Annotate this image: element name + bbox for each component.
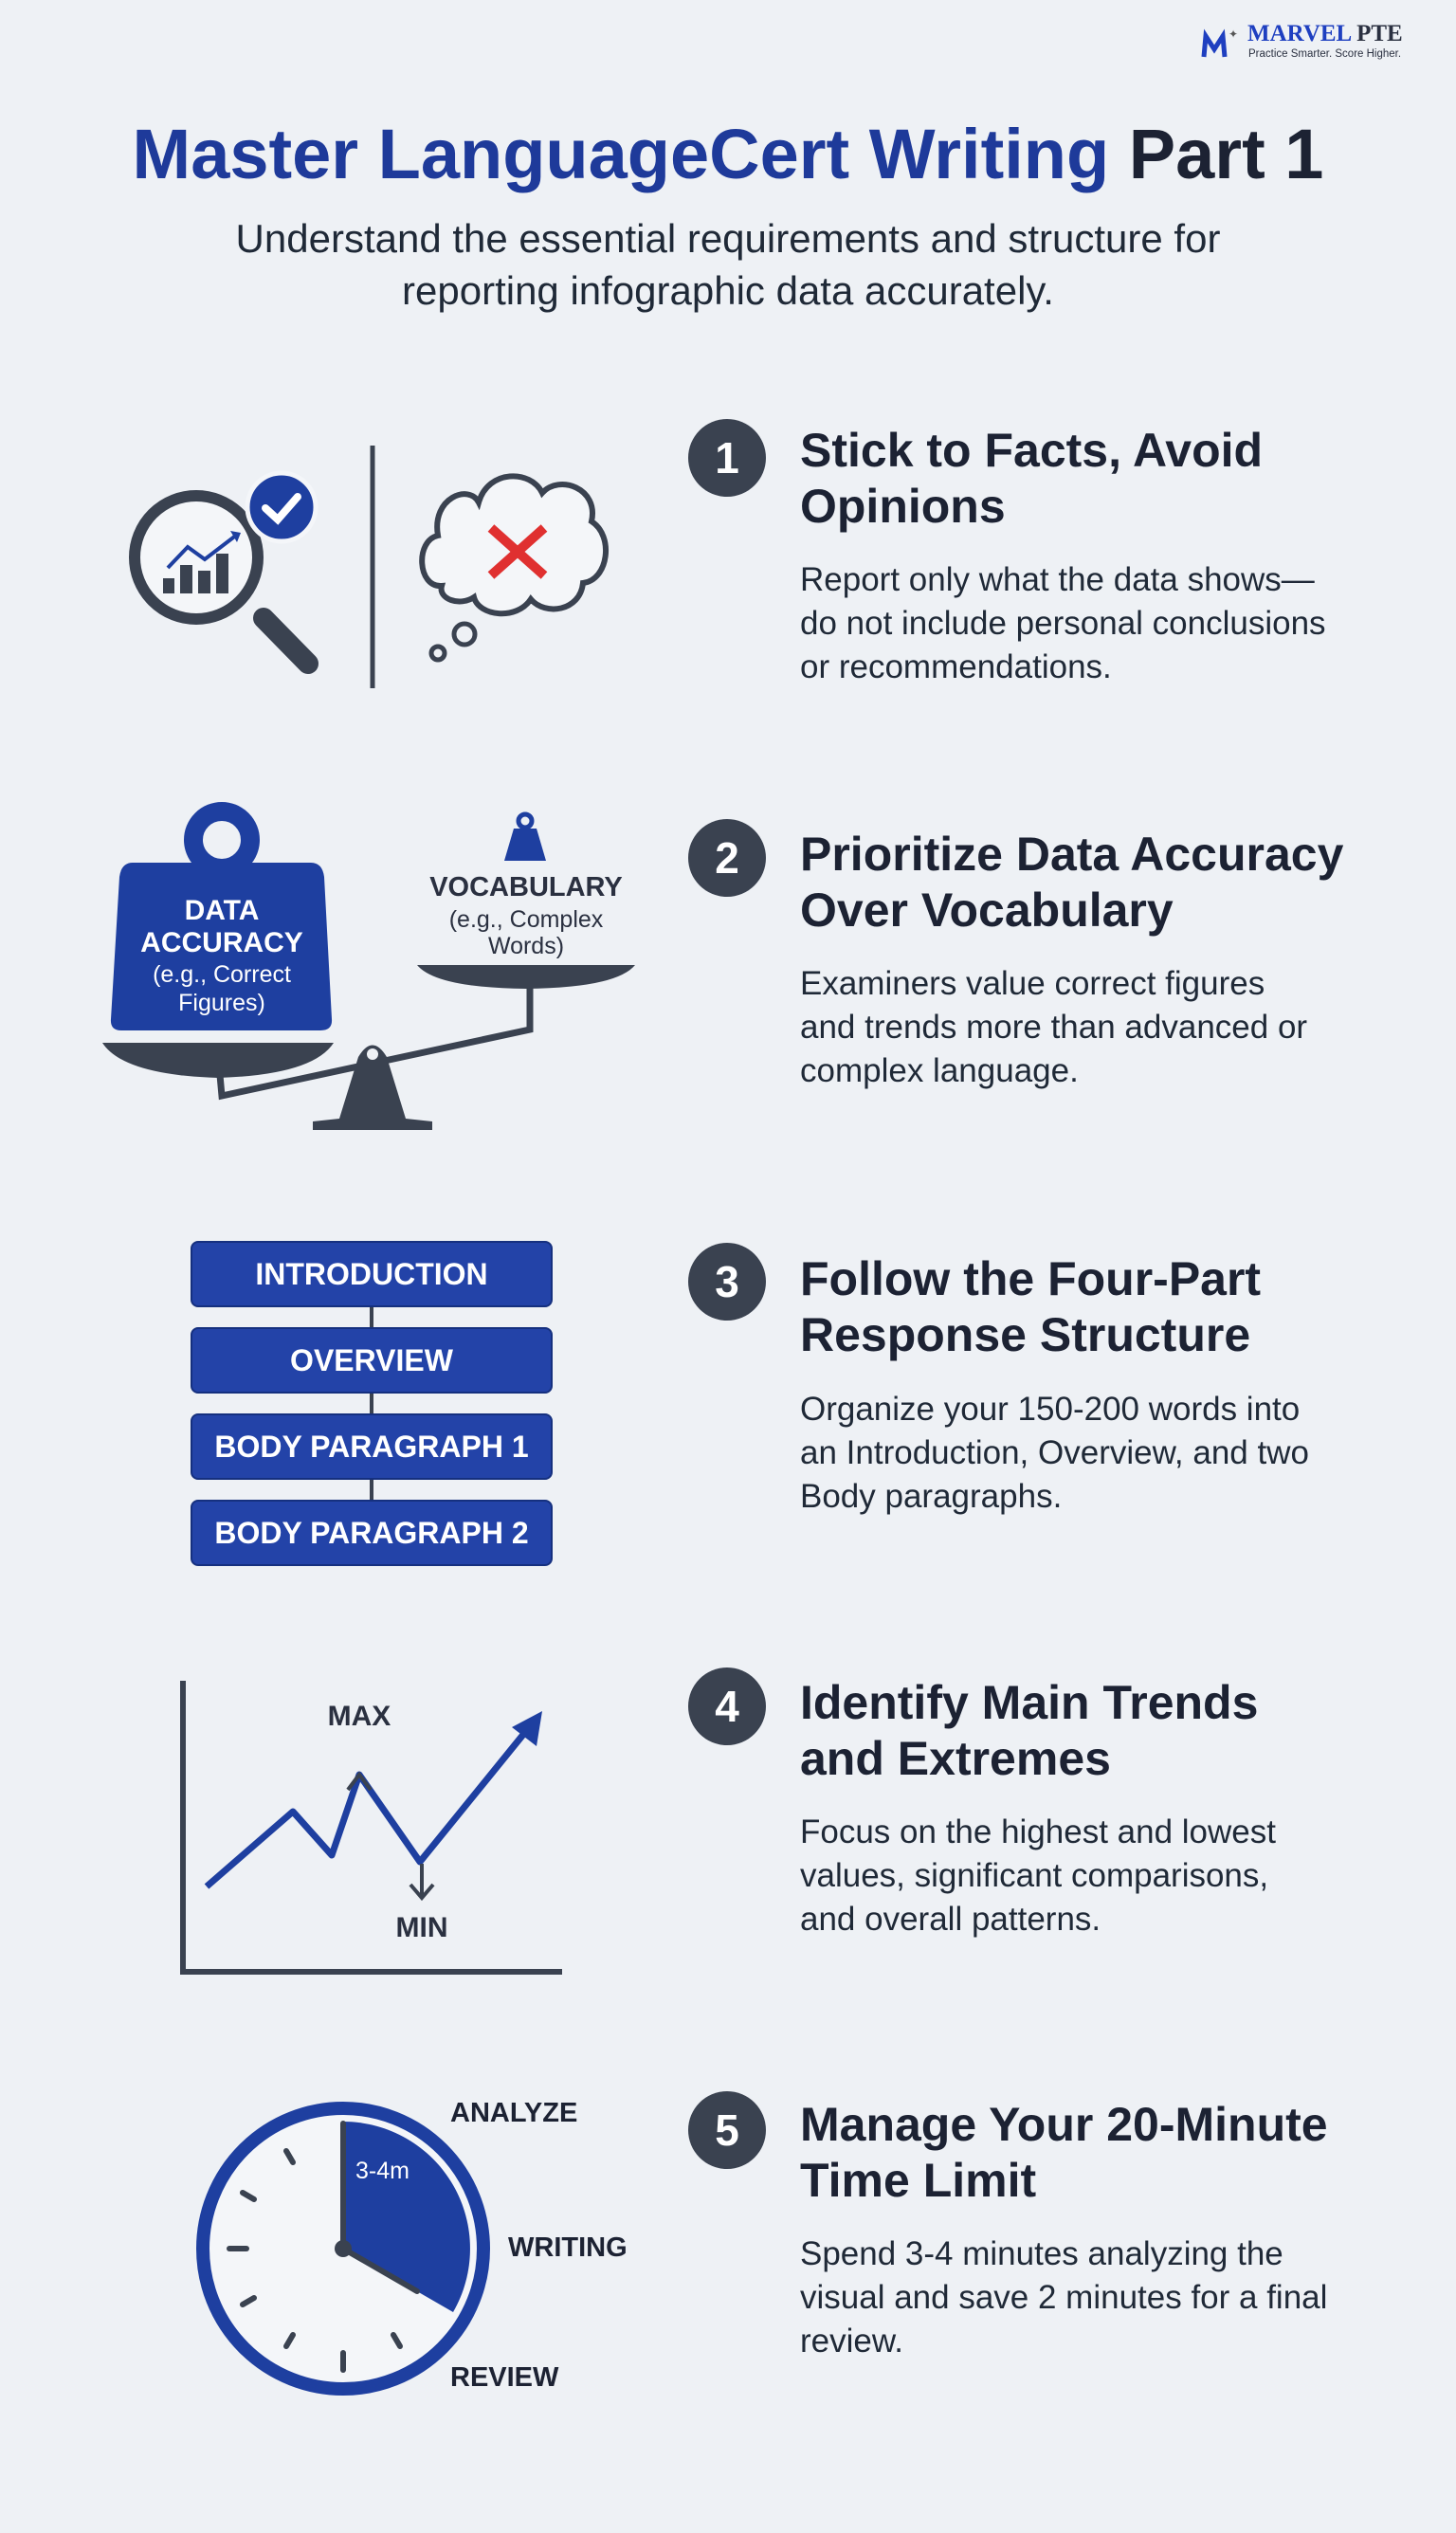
logo: Practice Smarter. Score Higher. [1248, 48, 1401, 60]
icon: four-part structure [370, 1307, 373, 1500]
text: Time Limit [800, 2154, 1036, 2207]
box: introduction [191, 1241, 553, 1307]
text: Focus on the highest and lowest [800, 1813, 1276, 1850]
icon: clock: WRITING [508, 2232, 628, 2263]
text: Opinions [800, 480, 1006, 533]
step 2: 2 [715, 833, 739, 883]
text: Follow the Four-Part [800, 1252, 1261, 1305]
text: an Introduction, Overview, and two [800, 1434, 1309, 1471]
text: review. [800, 2323, 903, 2360]
text: Examiners value correct figures [800, 965, 1265, 1002]
icon: balance scale: (e.g., Complex [449, 906, 604, 933]
step 4 [688, 1667, 766, 1745]
text: Body paragraphs. [800, 1478, 1062, 1515]
step 3 [688, 1243, 766, 1321]
text: Identify Main Trends [800, 1676, 1258, 1729]
icon: clock: REVIEW [450, 2362, 559, 2393]
icon: balance scale: DATA [185, 895, 259, 926]
icon: balance scale: ACCURACY [140, 927, 303, 958]
text: Over Vocabulary [800, 884, 1174, 937]
text: values, significant comparisons, [800, 1857, 1268, 1894]
step 4: 4 [715, 1682, 739, 1731]
box: body 2: BODY PARAGRAPH 2 [214, 1516, 529, 1550]
step 5 [688, 2091, 766, 2169]
step 2 [688, 819, 766, 897]
box: overview [191, 1327, 553, 1394]
icon: balance scale: VOCABULARY [429, 872, 623, 902]
step 3: 3 [715, 1257, 739, 1306]
subtitle: Understand the essential requirements and structure for [236, 216, 1220, 261]
logo: MARVEL PTE [1247, 21, 1403, 46]
box: body 2 [191, 1500, 553, 1566]
box: body 1 [191, 1413, 553, 1480]
text: do not include personal conclusions [800, 605, 1326, 642]
text: Stick to Facts, Avoid [800, 424, 1263, 477]
text: Report only what the data shows— [800, 561, 1315, 598]
text: Prioritize Data Accuracy [800, 828, 1343, 881]
icon: trend chart: MIN [396, 1912, 447, 1943]
subtitle [236, 216, 1220, 313]
icon: balance scale: Figures) [178, 990, 265, 1016]
icon: balance scale [102, 802, 635, 1130]
logo [1202, 21, 1403, 60]
step 1 [688, 419, 766, 497]
text: Manage Your 20-Minute [800, 2098, 1328, 2151]
text: Response Structure [800, 1308, 1250, 1361]
box: overview: OVERVIEW [290, 1343, 453, 1377]
text: and overall patterns. [800, 1901, 1101, 1938]
box: body 1: BODY PARAGRAPH 1 [214, 1430, 529, 1464]
icon: magnifier and thought cloud [129, 446, 609, 688]
logo: ✦ [1228, 27, 1238, 41]
text: visual and save 2 minutes for a final [800, 2279, 1327, 2316]
icon: balance scale: (e.g., Correct [153, 961, 291, 988]
text: Spend 3-4 minutes analyzing the [800, 2235, 1283, 2272]
text: or recommendations. [800, 648, 1112, 685]
box: introduction: INTRODUCTION [255, 1257, 488, 1291]
icon: clock: 3-4m [355, 2158, 410, 2184]
step 5: 5 [715, 2105, 739, 2155]
icon: clock [196, 2098, 628, 2396]
icon: balance scale: Words) [488, 933, 564, 959]
icon: trend chart [180, 1681, 562, 1975]
icon: clock: ANALYZE [450, 2098, 577, 2128]
title: Master LanguageCert Writing Part 1 [133, 115, 1323, 193]
step 1: 1 [715, 433, 739, 483]
text: complex language. [800, 1052, 1079, 1089]
icon: trend chart: MAX [328, 1701, 391, 1732]
subtitle: reporting infographic data accurately. [402, 268, 1054, 313]
text: Organize your 150-200 words into [800, 1391, 1300, 1428]
text: and trends more than advanced or [800, 1009, 1307, 1046]
text: and Extremes [800, 1732, 1111, 1785]
